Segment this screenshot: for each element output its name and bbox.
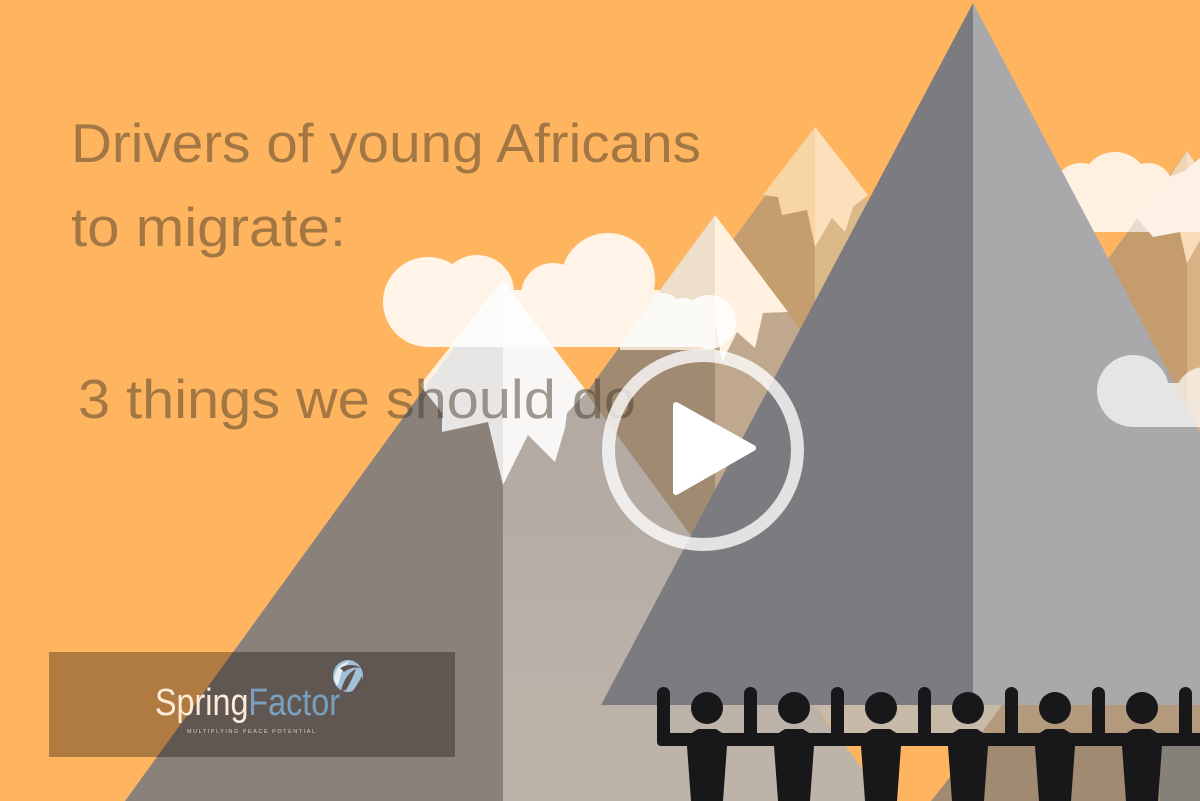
arm band	[657, 733, 1200, 746]
lower terrain	[815, 705, 1200, 801]
row of people holding up mountain	[657, 687, 1200, 801]
left mountain	[125, 280, 886, 801]
person 6	[1122, 692, 1162, 801]
logo wordmark: SpringFactor	[155, 682, 340, 724]
raised arms	[657, 687, 1192, 745]
lower right cloud	[1097, 355, 1200, 427]
person 3	[861, 692, 901, 801]
big foreground mountain	[601, 3, 1200, 705]
left mountain snow cap	[420, 280, 587, 485]
person 2	[774, 692, 814, 801]
large cloud	[383, 233, 736, 349]
subtitle: 3 things we should do	[78, 368, 636, 430]
person 1	[687, 692, 727, 801]
right cloud	[1054, 152, 1173, 232]
middle mountain	[500, 215, 900, 620]
logo panel	[49, 652, 455, 757]
right back mountain	[1040, 151, 1200, 440]
logo icon	[333, 660, 363, 692]
play button	[608, 356, 798, 544]
logo tagline: MULTIPLYING PEACE POTENTIAL	[187, 729, 315, 735]
title	[71, 112, 701, 430]
title line two: to migrate:	[71, 196, 346, 258]
right snow peak and cloud overlap	[1128, 158, 1200, 263]
person 5	[1035, 692, 1075, 801]
back mountain	[500, 127, 1000, 560]
title line one: Drivers of young Africans	[71, 112, 701, 174]
person 4	[948, 692, 988, 801]
